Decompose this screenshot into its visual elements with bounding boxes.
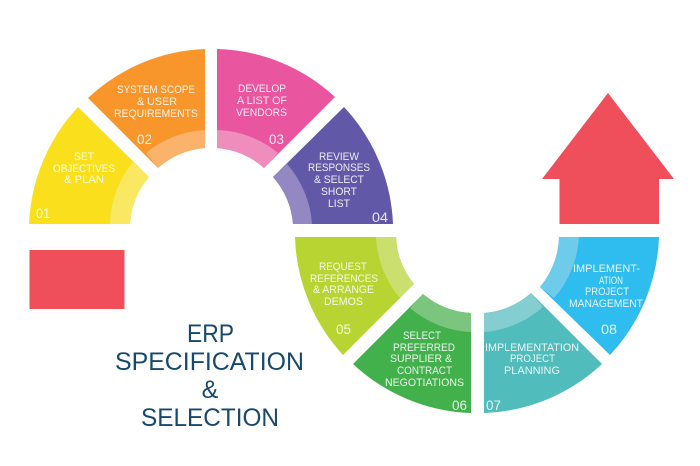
panel: step 01 set objectives and plan: & PLAN <box>64 174 104 186</box>
panel: step 04 review responses and select short list <box>273 107 393 225</box>
panel: step 05 request references and arrange demos: 05 <box>336 322 351 337</box>
panel: step 08 implementation project management: MANAGEMENT <box>569 298 643 310</box>
title: SPECIFICATION <box>115 348 304 376</box>
title: ERP <box>187 320 234 348</box>
panel: step 06 select preferred supplier and contract negotiations: CONTRACT <box>397 365 452 377</box>
panel: step 07 implementation project planning: PROJECT <box>510 353 555 365</box>
panel: step 02 system scope and user requirements: 02 <box>137 132 152 147</box>
panel: step 04 review responses and select short list: 04 <box>372 210 389 225</box>
panel: step 06 select preferred supplier and contract negotiations <box>353 294 471 413</box>
panel: step 06 select preferred supplier and contract negotiations: NEGOTIATIONS <box>385 377 464 389</box>
panel: step 07 implementation project planning <box>484 293 602 413</box>
panel: step 01 set objectives and plan: SET <box>74 151 94 163</box>
icon: red start rectangle <box>30 250 124 309</box>
panel: step 04 review responses and select short list: SHORT <box>321 186 357 198</box>
panel: step 05 request references and arrange demos: REQUEST <box>319 261 367 273</box>
panel: step 07 implementation project planning: 07 <box>486 398 501 413</box>
panel: step 05 request references and arrange demos <box>295 237 414 355</box>
panel: step 03 develop a list of vendors: VENDORS <box>236 107 287 119</box>
panel: step 08 implementation project management: ATION <box>599 275 623 287</box>
panel: step 08 implementation project management <box>540 237 659 355</box>
panel: step 06 select preferred supplier and contract negotiations: SUPPLIER & <box>390 353 453 365</box>
panel: step 08 implementation project management: IMPLEMENT- <box>573 263 640 275</box>
arrow: red up arrow <box>542 93 674 224</box>
panel: step 02 system scope and user requirements: & USER <box>137 96 177 108</box>
panel: step 04 review responses and select short list: LIST <box>328 198 350 210</box>
panel: step 05 request references and arrange demos: & ARRANGE <box>313 284 374 296</box>
panel: step 03 develop a list of vendors <box>217 49 335 168</box>
panel: step 07 implementation project planning: IMPLEMENTATION <box>485 342 579 354</box>
panel: step 03 develop a list of vendors: DEVELOP <box>238 83 286 95</box>
panel: step 02 system scope and user requirements: REQUIREMENTS <box>114 108 198 120</box>
panel: step 08 implementation project management: 08 <box>601 322 617 337</box>
title <box>115 320 304 432</box>
panel: step 01 set objectives and plan <box>29 107 149 224</box>
panel: step 06 select preferred supplier and contract negotiations: PREFERRED <box>393 342 455 354</box>
panel: step 01 set objectives and plan: 01 <box>36 206 50 221</box>
panel: step 02 system scope and user requirements <box>88 49 205 168</box>
panel: step 02 system scope and user requirements: SYSTEM SCOPE <box>117 84 195 96</box>
panel: step 03 develop a list of vendors: A LIST OF <box>237 95 287 107</box>
panel: step 05 request references and arrange demos: DEMOS <box>324 296 363 308</box>
panel: step 03 develop a list of vendors: 03 <box>269 132 284 147</box>
panel: step 04 review responses and select short list: REVIEW <box>319 151 360 163</box>
panel: step 04 review responses and select short list: RESPONSES <box>308 162 370 174</box>
panel: step 08 implementation project management: PROJECT <box>585 286 629 298</box>
panel: step 04 review responses and select short list: & SELECT <box>314 174 364 186</box>
title: SELECTION <box>141 404 279 432</box>
panel: step 07 implementation project planning: PLANNING <box>504 365 560 377</box>
panel: step 01 set objectives and plan: OBJECTIVES <box>53 163 115 175</box>
panel: step 05 request references and arrange demos: REFERENCES <box>310 273 378 285</box>
panel: step 06 select preferred supplier and contract negotiations: SELECT <box>403 330 441 342</box>
panel: step 06 select preferred supplier and contract negotiations: 06 <box>452 398 467 413</box>
title: & <box>202 376 219 404</box>
